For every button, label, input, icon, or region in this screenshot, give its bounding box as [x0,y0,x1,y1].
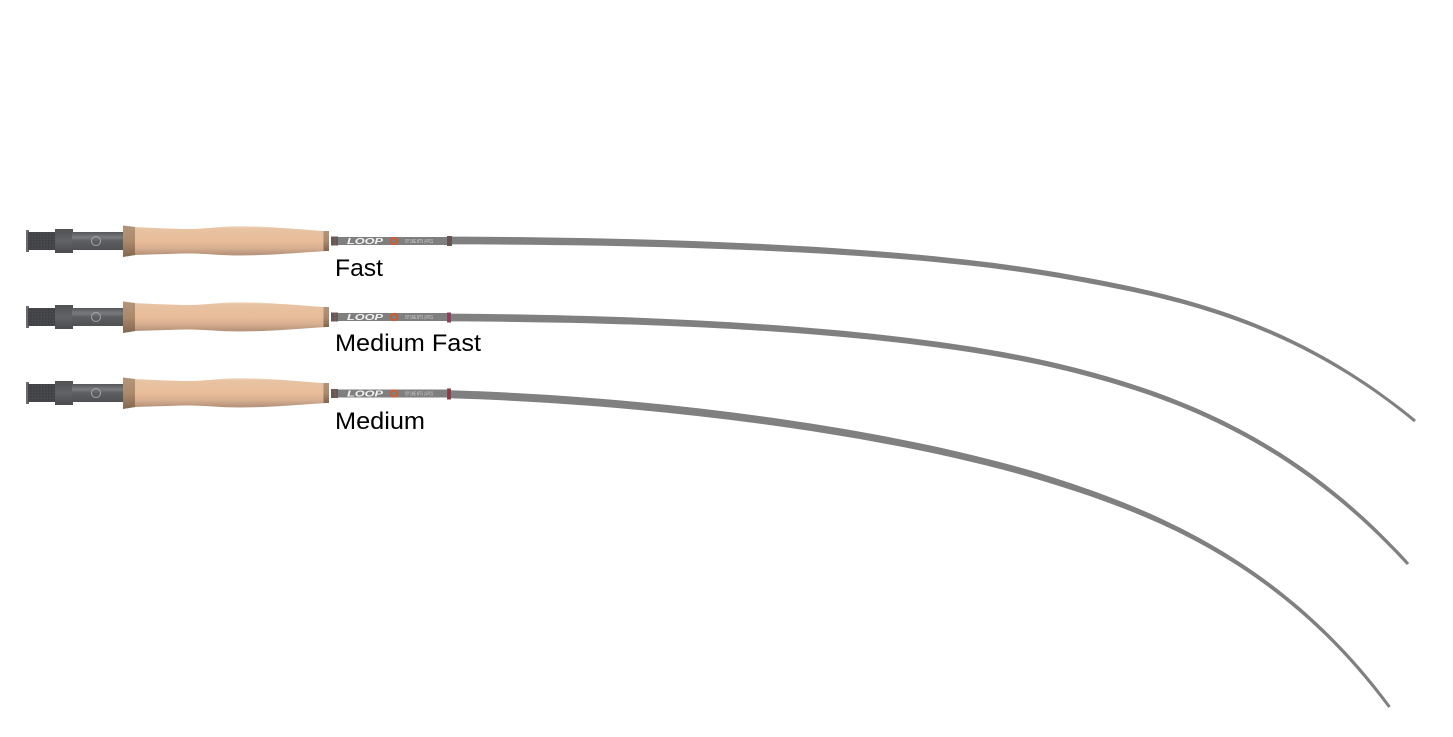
rod blank curve [450,314,1409,565]
rod butt section with logo: LOOP [347,237,384,246]
rod blank curve [450,237,1416,422]
rod blank curve [450,390,1391,708]
label: Fast: Fast [335,255,383,282]
rod butt section with logo: 9'0" LINE WT 5 | 4 PCS [405,239,433,245]
rod handle [26,226,329,257]
rod handle [26,302,329,333]
rod: medium [26,378,1391,708]
rod handle [26,378,329,409]
rod butt section with logo: LOOP [347,313,384,322]
rod butt section with logo [331,312,451,322]
rod butt section with logo: LOOP [347,390,384,398]
rod butt section with logo: 9'0" LINE WT 5 | 4 PCS [405,391,433,397]
rod butt section with logo [331,388,451,400]
label: Medium Fast: Medium Fast [335,330,481,357]
rod: medium fast [26,302,1409,565]
rod butt section with logo [331,236,452,246]
rod: fast [26,226,1416,422]
rod butt section with logo: 9'0" LINE WT 5 | 4 PCS [405,315,433,321]
label: Medium: Medium [335,408,425,435]
